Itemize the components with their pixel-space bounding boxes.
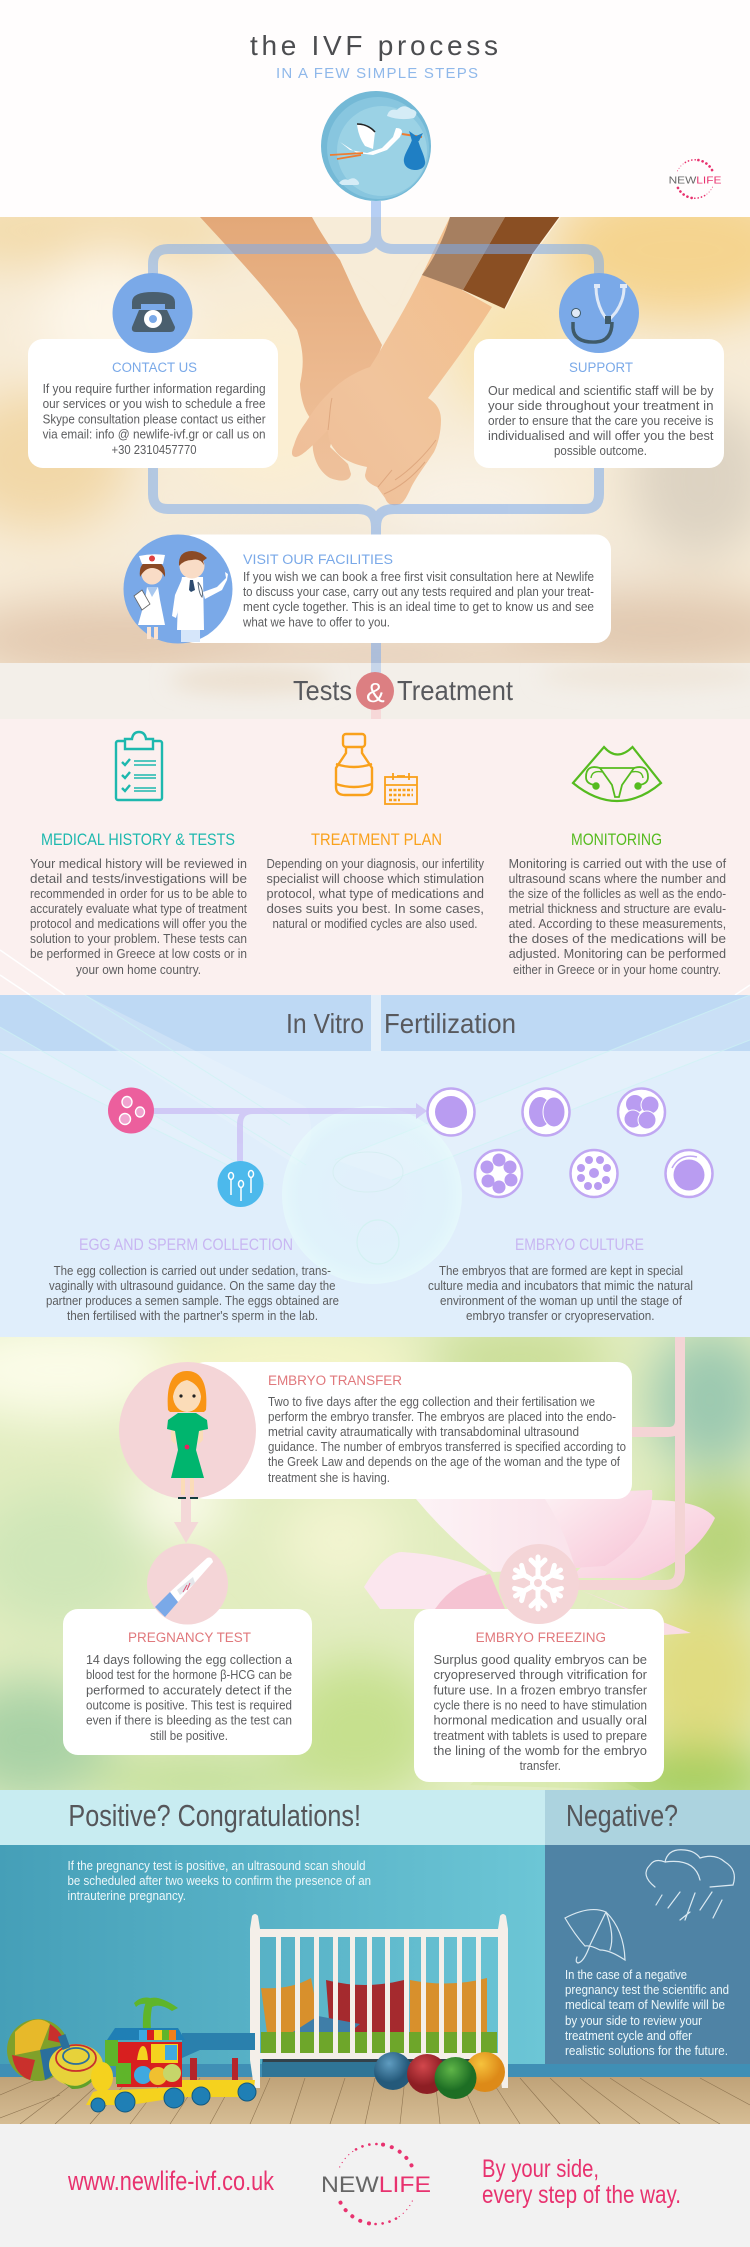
text: visit: If you wish we can book a free first visit consultation here at Newlife: [243, 569, 594, 584]
column: egg and sperm collection: The egg collection is carried out under sedation, trans-: [54, 1263, 331, 1278]
column: embryo culture: [428, 1236, 693, 1323]
column: medical history: MEDICAL HISTORY & TESTS: [41, 831, 235, 849]
column: treatment plan: doses suits you best. In some cases,: [266, 901, 484, 916]
text: pregnancy test: performed to accurately detect if the: [86, 1682, 292, 1698]
panel: contact us: [28, 273, 278, 468]
column: treatment plan: Depending on your diagnosis, our infertility: [266, 856, 485, 871]
text: support: Our medical and scientific staff will be by: [488, 383, 714, 398]
column: embryo culture: environment of the woman up until the stage of: [440, 1293, 682, 1308]
heading: support: SUPPORT: [569, 360, 633, 375]
icon: ultrasound uterus: [573, 747, 661, 801]
panel: hands photo background: [0, 217, 750, 663]
coloured balls: [374, 2052, 505, 2099]
panel: visit our facilities: [124, 534, 611, 644]
column: egg and sperm collection: EGG AND SPERM COLLECTION: [79, 1236, 293, 1254]
text: embryo transfer: the Greek Law and depends on the age of the woman and the type of: [268, 1454, 620, 1469]
subtitle: IN A FEW SIMPLE STEPS: [276, 65, 478, 82]
icon: bottle and calendar: [336, 734, 417, 804]
tagline: By your side,: [482, 2155, 599, 2183]
icon: eggs: [108, 1088, 154, 1134]
heading: embryo freezing: EMBRYO FREEZING: [476, 1630, 606, 1645]
icon: telephone: [112, 273, 192, 353]
text: embryo freezing: transfer.: [520, 1758, 561, 1773]
column: treatment plan: [266, 831, 485, 931]
logo: Newlife: [321, 2144, 431, 2224]
panel: embryo transfer: [119, 1362, 632, 1499]
tagline: every step of the way.: [482, 2181, 681, 2209]
heading: tests and treatment: &: [366, 677, 385, 708]
column: monitoring: the doses of the medications will be: [509, 931, 726, 946]
text: contact us: via email: info @ newlife-ivf.gr or call us on: [43, 426, 266, 442]
column: egg and sperm collection: [46, 1236, 339, 1323]
lotus petals: [570, 1500, 715, 1578]
heading: in vitro fertilization: Fertilization: [384, 1008, 516, 1039]
icon: chalk rain cloud: [646, 1850, 734, 1920]
icon: stork in circle: [321, 91, 431, 201]
icon: clipboard: [116, 732, 162, 800]
text: visit: [242, 569, 594, 630]
toy: puzzle ball: [7, 2019, 69, 2081]
icon: pregnancy test stick: [147, 1544, 228, 1624]
icons: embryo stages: [428, 1088, 712, 1197]
pink connector pipe: [575, 1337, 680, 1585]
column: medical history: protocol and medications will offer you the: [30, 916, 247, 931]
sleeve: [422, 217, 505, 290]
column: egg and sperm collection: then fertilised with the partner's sperm in the lab.: [67, 1308, 318, 1323]
column: medical history: be performed in Greece at low costs or in: [30, 946, 247, 961]
icon: chalk umbrella: [565, 1910, 625, 1963]
text: contact us: our services or you wish to schedule a free: [43, 396, 266, 411]
text: embryo freezing: treatment with tablets is used to prepare: [434, 1728, 647, 1743]
tagline: [482, 2155, 681, 2209]
text: negative: In the case of a negative: [565, 1967, 687, 1982]
column: treatment plan: natural or modified cycles are also used.: [272, 916, 478, 931]
text: negative: medical team of Newlife will be: [565, 1997, 725, 2012]
text: visit: to discuss your case, carry out any tests required and plan your treat-: [243, 584, 594, 599]
arrow: transfer to pregnancy test: [174, 1499, 198, 1543]
band: positive heading background: [0, 1790, 545, 1845]
left arm: [200, 217, 382, 481]
column: monitoring: [509, 831, 727, 977]
skirting board: [0, 2064, 750, 2078]
column: treatment plan: TREATMENT PLAN: [311, 831, 442, 849]
band: tests heading background: [0, 663, 750, 719]
column: embryo culture: culture media and incubators that mimic the natural: [428, 1278, 693, 1293]
column: monitoring: the size of the follicles as well as the endo-: [509, 886, 726, 901]
text: support: your side throughout your treatment in: [488, 398, 714, 413]
text: contact us: Skype consultation please contact us either: [43, 412, 266, 426]
panel: footer: [0, 2124, 750, 2247]
heading: tests and treatment: Tests: [293, 675, 352, 706]
logo: small Newlife: NEWLIFE: [669, 174, 721, 186]
panel: negative: [545, 1790, 750, 2064]
text: support: order to ensure that the care you receive is: [488, 413, 714, 428]
text: embryo freezing: the lining of the womb for the embryo: [434, 1743, 647, 1758]
text: support: possible outcome.: [554, 443, 647, 458]
text: embryo freezing: future use. In a frozen embryo transfer: [434, 1682, 648, 1698]
text: embryo freezing: cryopreserved through vitrification for: [434, 1667, 648, 1682]
column: medical history: Your medical history will be reviewed in: [30, 856, 247, 871]
text: pregnancy test: even if there is bleeding as the test can: [86, 1712, 292, 1728]
blue connector pipes: [153, 201, 599, 672]
text: embryo freezing: cycle there is no need to have stimulation: [434, 1698, 647, 1712]
panel: support: [474, 273, 724, 468]
text: visit: what we have to offer to you.: [242, 614, 390, 630]
text: embryo freezing: [434, 1652, 648, 1773]
text: pregnancy test: 14 days following the egg collection a: [86, 1652, 293, 1667]
text: negative: pregnancy test the scientific and: [565, 1982, 729, 1997]
column: medical history: your own home country.: [76, 962, 201, 977]
panel: outcome room scene: [0, 1790, 750, 2124]
column: treatment plan: protocol, what type of medications and: [266, 886, 484, 901]
toy: spinning top: [49, 2034, 103, 2089]
text: embryo transfer: Two to five days after the egg collection and their fertilisation we: [268, 1394, 595, 1409]
finger shading: [328, 398, 436, 494]
column: monitoring: MONITORING: [571, 831, 662, 849]
column: medical history: solution to your problem. These tests can: [30, 931, 247, 946]
icon: woman: [119, 1362, 256, 1499]
panel: embryo freezing: [414, 1544, 664, 1782]
heading: pregnancy test: PREGNANCY TEST: [128, 1630, 251, 1645]
text: embryo transfer: guidance. The number of embryos transferred is specified according to: [268, 1439, 626, 1454]
title: the IVF process: [250, 30, 498, 61]
icon: snowflake: [499, 1544, 579, 1624]
right hand and arm: [292, 217, 505, 505]
column: medical history: [30, 831, 247, 977]
heading: tests and treatment: Treatment: [397, 675, 513, 706]
column: embryo culture: EMBRYO CULTURE: [515, 1236, 644, 1254]
icon: stethoscope: [559, 273, 639, 353]
text: negative: treatment cycle and offer: [565, 2028, 693, 2043]
heading: in vitro fertilization: In Vitro: [286, 1008, 364, 1039]
heading: embryo transfer: EMBRYO TRANSFER: [268, 1373, 402, 1388]
text: negative: [565, 1967, 729, 2058]
crib: [250, 1914, 508, 2088]
panel: in vitro fertilization: [0, 995, 750, 1337]
column: medical history: recommended in order for us to be able to: [30, 886, 247, 901]
toy: train: [86, 1998, 256, 2112]
text: pregnancy test: blood test for the hormone β-HCG can be: [86, 1667, 292, 1682]
text: positive: intrauterine pregnancy.: [68, 1888, 186, 1903]
text: visit: ment cycle together. This is an ideal time to get to know us and see: [243, 599, 594, 614]
arrow: egg and sperm to embryo: [154, 1103, 427, 1161]
text: embryo transfer: metrial cavity atraumatically with transabdominal ultrasound: [268, 1424, 579, 1439]
column: egg and sperm collection: partner produces a semen sample. The eggs obtained are: [46, 1293, 339, 1308]
text: pregnancy test: outcome is positive. This test is required: [86, 1698, 292, 1712]
panel: pregnancy test: [63, 1544, 312, 1755]
panel: lotus photo background: [0, 1337, 750, 1790]
column: embryo culture: embryo transfer or cryopreservation.: [466, 1308, 654, 1323]
text: embryo transfer: treatment she is having.: [268, 1470, 390, 1485]
column: monitoring: ultrasound scans where the number and: [509, 871, 726, 886]
text: negative: realistic solutions for the future.: [565, 2043, 728, 2058]
floor: [0, 2077, 750, 2124]
text: pregnancy test: still be positive.: [150, 1728, 228, 1743]
heading: negative: Negative?: [566, 1798, 678, 1833]
wall: [0, 1845, 545, 2065]
text: embryo freezing: Surplus good quality embryos can be: [434, 1652, 647, 1667]
heading: positive: Positive? Congratulations!: [68, 1798, 361, 1833]
column: monitoring: Monitoring is carried out with the use of: [509, 856, 727, 871]
heading: contact us: CONTACT US: [112, 360, 197, 375]
panel: tests and treatment: [0, 661, 750, 995]
text: positive: If the pregnancy test is positive, an ultrasound scan should: [68, 1858, 366, 1873]
column: monitoring: metrial thickness and structure are evalu-: [509, 901, 726, 916]
icon: nurse and doctor: [124, 534, 232, 644]
text: negative: by your side to review your: [565, 2013, 703, 2028]
text: embryo transfer: [268, 1394, 626, 1485]
column: monitoring: ated. According to these measurements,: [509, 916, 726, 931]
column: monitoring: adjusted. Monitoring can be performed: [509, 946, 726, 961]
logo: Newlife: NEW LIFE: [321, 2172, 431, 2197]
text: embryo freezing: hormonal medication and usually oral: [434, 1712, 647, 1728]
column: embryo culture: The embryos that are formed are kept in special: [439, 1263, 683, 1278]
icon: sperm: [218, 1161, 264, 1207]
column: medical history: detail and tests/investigations will be: [30, 871, 247, 886]
column: medical history: accurately evaluate what type of treatment: [30, 901, 247, 916]
heading: visit: VISIT OUR FACILITIES: [243, 552, 393, 567]
text: positive: be scheduled after two weeks to confirm the presence of an: [68, 1873, 371, 1888]
text: contact us: [43, 381, 266, 457]
column: monitoring: either in Greece or in your home country.: [513, 962, 721, 977]
panel background with test tubes: [0, 995, 750, 1337]
text: embryo transfer: perform the embryo transfer. The embryos are placed into the endo-: [268, 1409, 616, 1424]
text: support: individualised and will offer you the best: [488, 428, 714, 443]
logo: small Newlife: [669, 160, 721, 198]
text: contact us: If you require further information regarding: [43, 381, 266, 396]
column: treatment plan: specialist will choose which stimulation: [266, 871, 484, 886]
heading: in vitro fertilization: [286, 1008, 516, 1039]
pink panel background: [0, 719, 750, 995]
text: pregnancy test: [86, 1652, 293, 1743]
column: egg and sperm collection: vaginally with ultrasound guidance. On the same day the: [49, 1278, 336, 1293]
text: positive: [68, 1858, 371, 1903]
heading: tests and treatment: [293, 672, 513, 710]
text: support: [488, 383, 714, 458]
link: website: www.newlife-ivf.co.uk: [67, 2166, 274, 2196]
text: contact us: +30 2310457770: [112, 442, 196, 457]
header background: [0, 0, 750, 217]
